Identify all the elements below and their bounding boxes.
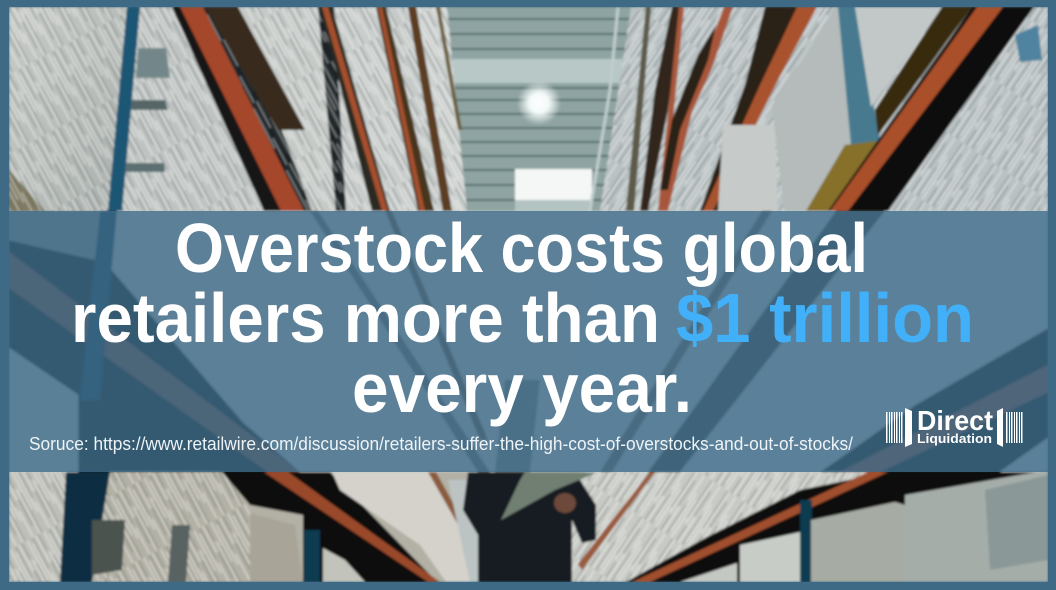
highlight: $1 trillion: $1 trillion [676, 279, 974, 357]
logo right barcode [997, 408, 1022, 447]
ceiling lamp [517, 81, 561, 125]
title line 1: Overstock costs global [175, 209, 868, 287]
right shelves, upper level [600, 7, 1048, 211]
logo: Direct Liquidation [886, 405, 1022, 447]
left wrap texture, upper [9, 7, 467, 211]
title line 3: every year. [352, 349, 692, 427]
right wrap texture, upper [600, 7, 1048, 211]
left shelves, floor level [9, 470, 480, 582]
title line 2: retailers more than [71, 279, 660, 357]
right shelves, floor level [570, 470, 1048, 582]
left shelves, upper level [9, 7, 467, 211]
left shelves, lower level under banner [9, 211, 600, 472]
ceiling [440, 7, 640, 217]
logo left barcode [886, 408, 912, 447]
logo wordmark [917, 405, 993, 446]
title [71, 209, 974, 427]
right shelves, lower level under banner [560, 211, 1048, 472]
logo word: Direct: Direct [917, 405, 993, 436]
banner: translucent blue band [9, 211, 1048, 472]
source citation: Soruce: https://www.retailwire.com/discussion/retailers-suffer-the-high-cost-of-overstocks-and-out-of-stocks/ [29, 433, 854, 454]
right wrap texture, floor [570, 472, 864, 582]
logo word: Liquidation: Liquidation [917, 431, 992, 446]
person holding clipboard [463, 472, 596, 582]
left wrap texture, floor [9, 472, 250, 582]
